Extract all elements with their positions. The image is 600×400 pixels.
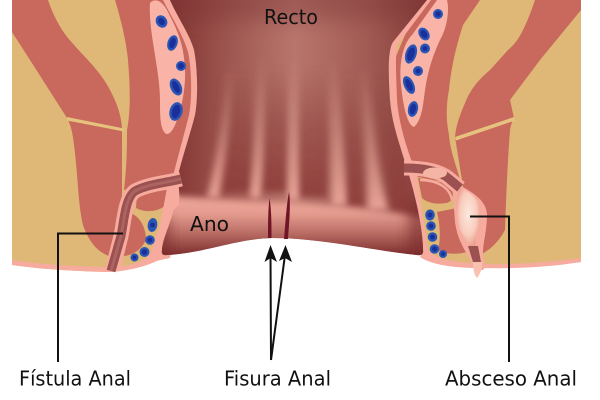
- inner sphincter muscle right: [388, 0, 480, 186]
- label: Recto: Recto: [264, 5, 318, 29]
- bottom skin line: [12, 250, 581, 272]
- left beige tendon line: [67, 117, 124, 132]
- upper lobe under abscess tract: [418, 178, 453, 204]
- rectum: [162, 0, 427, 256]
- label: Fístula Anal: Fístula Anal: [19, 366, 131, 390]
- panel: right muscles: [388, 0, 581, 258]
- leader line: Absceso Anal: [470, 216, 509, 362]
- panel: pink walls: [142, 0, 446, 264]
- panel: left muscles: [12, 0, 198, 256]
- icon: blue cells right: [400, 9, 447, 258]
- arrows: Fisura Anal: [264, 245, 292, 360]
- tail: [473, 262, 482, 278]
- label: Fisura Anal: Fisura Anal: [224, 366, 331, 390]
- dark corners: [162, 216, 176, 254]
- inner sphincter muscle: [115, 0, 198, 190]
- right beige tendon line: [455, 117, 515, 140]
- icon: blue cells left: [130, 13, 186, 261]
- fold ridges: [204, 80, 391, 212]
- abscess cavity: [457, 187, 480, 247]
- label: Ano: Ano: [190, 212, 229, 236]
- left lower wall: [142, 175, 182, 264]
- panel: left vessel pad: [130, 0, 186, 261]
- outer levator muscle: [12, 0, 122, 256]
- lower lobe near vessels right: [437, 208, 467, 254]
- fistula tract: [111, 179, 181, 271]
- right wall band: [389, 0, 431, 178]
- tract channel: [404, 168, 460, 188]
- label: Absceso Anal: Absceso Anal: [445, 366, 577, 390]
- panel: right vessel pad: [400, 0, 448, 258]
- tract exit: [468, 246, 481, 262]
- outer levator muscle right: [455, 0, 581, 258]
- background fat tissue: [12, 0, 581, 272]
- lower lobe near vessels: [122, 213, 146, 256]
- small lobe under fistula: [136, 186, 168, 211]
- abscess: [404, 168, 487, 278]
- leader line: Fístula Anal: [58, 234, 123, 362]
- right lower wall: [408, 172, 446, 264]
- abscess outline: [454, 184, 487, 270]
- pale band of anal canal: [162, 192, 424, 256]
- tract outline: [404, 168, 460, 188]
- fold lobes: [220, 83, 406, 210]
- fissures: [268, 192, 290, 239]
- left wall band: [163, 0, 197, 180]
- pale bulge: [423, 168, 447, 178]
